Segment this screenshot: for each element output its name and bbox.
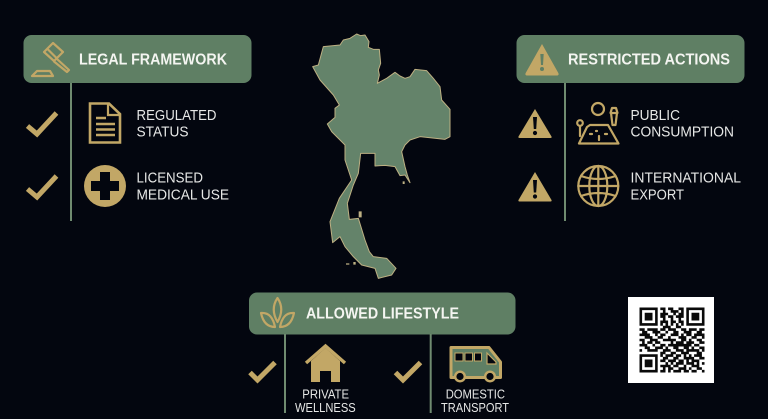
icon: globe <box>578 166 618 206</box>
QR code <box>628 297 714 383</box>
text: licensed medical use: LICENSED <box>136 170 203 186</box>
text: domestic transport: DOMESTIC <box>446 386 505 402</box>
text: regulated status <box>136 107 217 140</box>
text: international export: INTERNATIONAL <box>630 170 741 186</box>
text: international export: EXPORT <box>630 186 684 204</box>
icon: leaves <box>261 298 294 327</box>
check mark: regulated status <box>28 113 56 134</box>
allowed heading text: ALLOWED LIFESTYLE <box>306 306 459 322</box>
text: regulated status: REGULATED <box>136 107 217 124</box>
panel: allowed lifestyle <box>249 292 516 415</box>
icon: header warning triangle <box>526 45 558 75</box>
check mark: domestic transport <box>396 362 420 380</box>
legal heading bar <box>24 35 252 83</box>
map of Thailand <box>313 34 450 278</box>
legal heading text: LEGAL FRAMEWORK <box>79 52 228 68</box>
text: regulated status: STATUS <box>136 124 188 140</box>
allowed heading bar <box>249 292 516 334</box>
panel: legal framework <box>24 35 252 221</box>
icon: medical cross <box>84 165 126 207</box>
text: domestic transport <box>441 386 509 415</box>
icon: house <box>306 346 345 382</box>
icon: warning triangle two <box>518 172 552 202</box>
text: private wellness: WELLNESS <box>295 400 356 415</box>
icon: public place <box>577 103 618 144</box>
text: public consumption: CONSUMPTION <box>630 124 734 140</box>
check mark: licensed medical use <box>28 176 56 197</box>
text: international export <box>630 170 741 204</box>
check mark: private wellness <box>250 362 275 380</box>
text: public consumption: PUBLIC <box>630 107 680 124</box>
text: private wellness <box>295 386 356 415</box>
icon: bus <box>451 348 500 381</box>
text: licensed medical use <box>136 170 229 204</box>
text: public consumption <box>630 107 734 140</box>
text: domestic transport: TRANSPORT <box>441 400 509 415</box>
text: licensed medical use: MEDICAL USE <box>136 186 229 204</box>
icon: document <box>90 104 120 142</box>
text: private wellness: PRIVATE <box>302 386 349 402</box>
restricted heading text: RESTRICTED ACTIONS <box>568 52 730 68</box>
icon: warning triangle one <box>518 109 552 138</box>
panel: restricted actions <box>516 35 744 221</box>
restricted heading bar <box>516 35 744 83</box>
icon: gavel <box>32 43 69 76</box>
